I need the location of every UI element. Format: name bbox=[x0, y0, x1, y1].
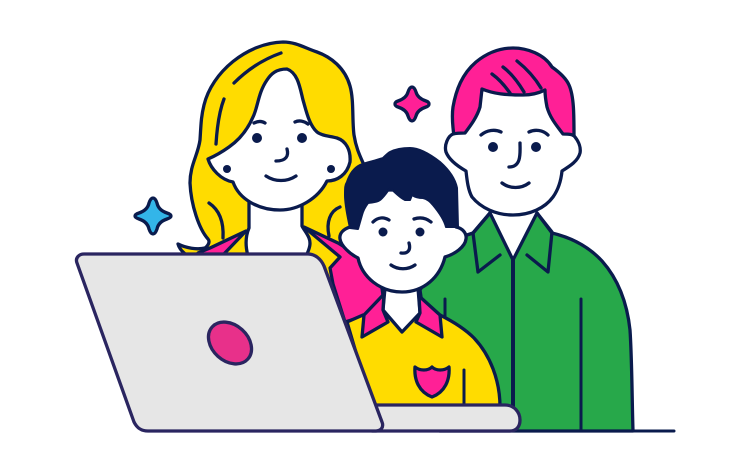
woman facial features bbox=[223, 121, 335, 180]
boy facial features bbox=[373, 218, 431, 269]
woman hair bbox=[178, 42, 368, 300]
boy sleeve line bbox=[462, 370, 466, 405]
man sleeve line right bbox=[580, 299, 582, 431]
woman neck bbox=[246, 198, 310, 256]
ground line bbox=[500, 430, 674, 432]
boy collar right bbox=[416, 296, 442, 337]
man hair bbox=[452, 48, 574, 150]
boy shirt badge bbox=[415, 367, 449, 397]
woman jacket left lapel bbox=[198, 231, 246, 258]
man bbox=[420, 48, 633, 431]
man collar right bbox=[527, 213, 552, 272]
boy face bbox=[340, 190, 466, 292]
woman bbox=[178, 42, 385, 322]
woman face bbox=[208, 69, 350, 210]
boy hair bbox=[345, 148, 458, 229]
man collar left bbox=[473, 213, 500, 272]
man face bbox=[445, 89, 580, 215]
laptop base bbox=[372, 405, 520, 431]
man collar centre bbox=[490, 213, 537, 260]
woman hair strands bbox=[209, 53, 340, 238]
icon: blue sparkle bbox=[135, 198, 171, 234]
laptop screen bbox=[76, 254, 383, 431]
laptop bbox=[76, 254, 520, 431]
man hair strands bbox=[492, 61, 541, 93]
man facial features bbox=[481, 130, 548, 188]
woman jacket right bbox=[304, 227, 385, 322]
boy collar left bbox=[362, 294, 388, 337]
man neck bbox=[488, 206, 539, 260]
boy bbox=[340, 148, 500, 407]
man shirt placket bbox=[511, 260, 515, 431]
icon: pink sparkle bbox=[395, 87, 429, 121]
laptop logo bbox=[200, 314, 260, 372]
man sleeve line left bbox=[444, 299, 446, 320]
boy shirt bbox=[347, 315, 500, 407]
man shirt bbox=[420, 213, 633, 431]
boy neck bbox=[383, 288, 420, 332]
